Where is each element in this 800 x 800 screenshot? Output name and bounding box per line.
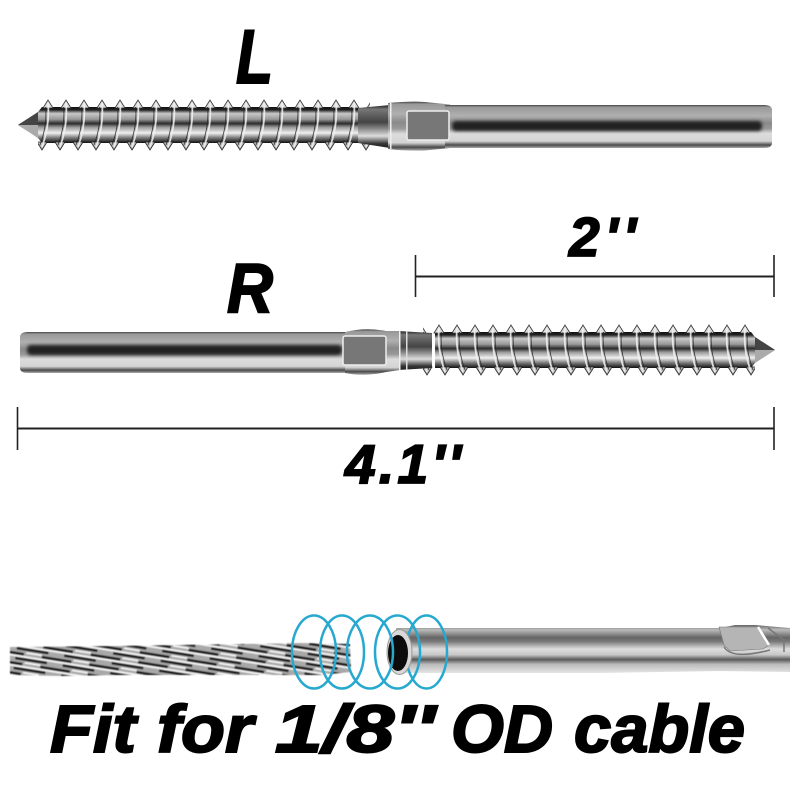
screw R: right-hand threaded terminal (20, 322, 775, 378)
tube L (445, 105, 772, 148)
caption: cable (574, 692, 745, 767)
screw L: left-hand threaded terminal (18, 97, 772, 153)
cable assembly (10, 616, 790, 688)
dimension 2 inch (415, 206, 774, 297)
neck L (358, 105, 390, 148)
bottom tube (396, 625, 790, 673)
dark band L (452, 121, 762, 131)
threaded section R (423, 322, 775, 378)
swaged notch (719, 627, 769, 651)
caption: OD (451, 692, 553, 767)
wire rope cable (10, 643, 351, 676)
caption: Fit (50, 692, 139, 767)
swage L (388, 102, 450, 151)
tube R (20, 332, 345, 373)
caption: 1/8'' (275, 692, 438, 767)
blue rings (292, 616, 420, 688)
dark band R (27, 345, 342, 355)
tube opening (387, 630, 412, 674)
square flat L (407, 111, 449, 140)
square flat R (343, 336, 386, 365)
caption: for (157, 692, 257, 767)
neck R (398, 331, 432, 370)
label R: R (227, 249, 273, 327)
rear blue ring (406, 616, 447, 688)
label L: L (236, 15, 273, 100)
caption (50, 692, 745, 767)
threaded section L (18, 97, 370, 153)
label 2 inch: 2'' (568, 206, 638, 268)
dimension 4.1 inch (17, 407, 774, 495)
swage R (345, 329, 400, 375)
label 4.1 inch: 4.1'' (344, 433, 463, 495)
